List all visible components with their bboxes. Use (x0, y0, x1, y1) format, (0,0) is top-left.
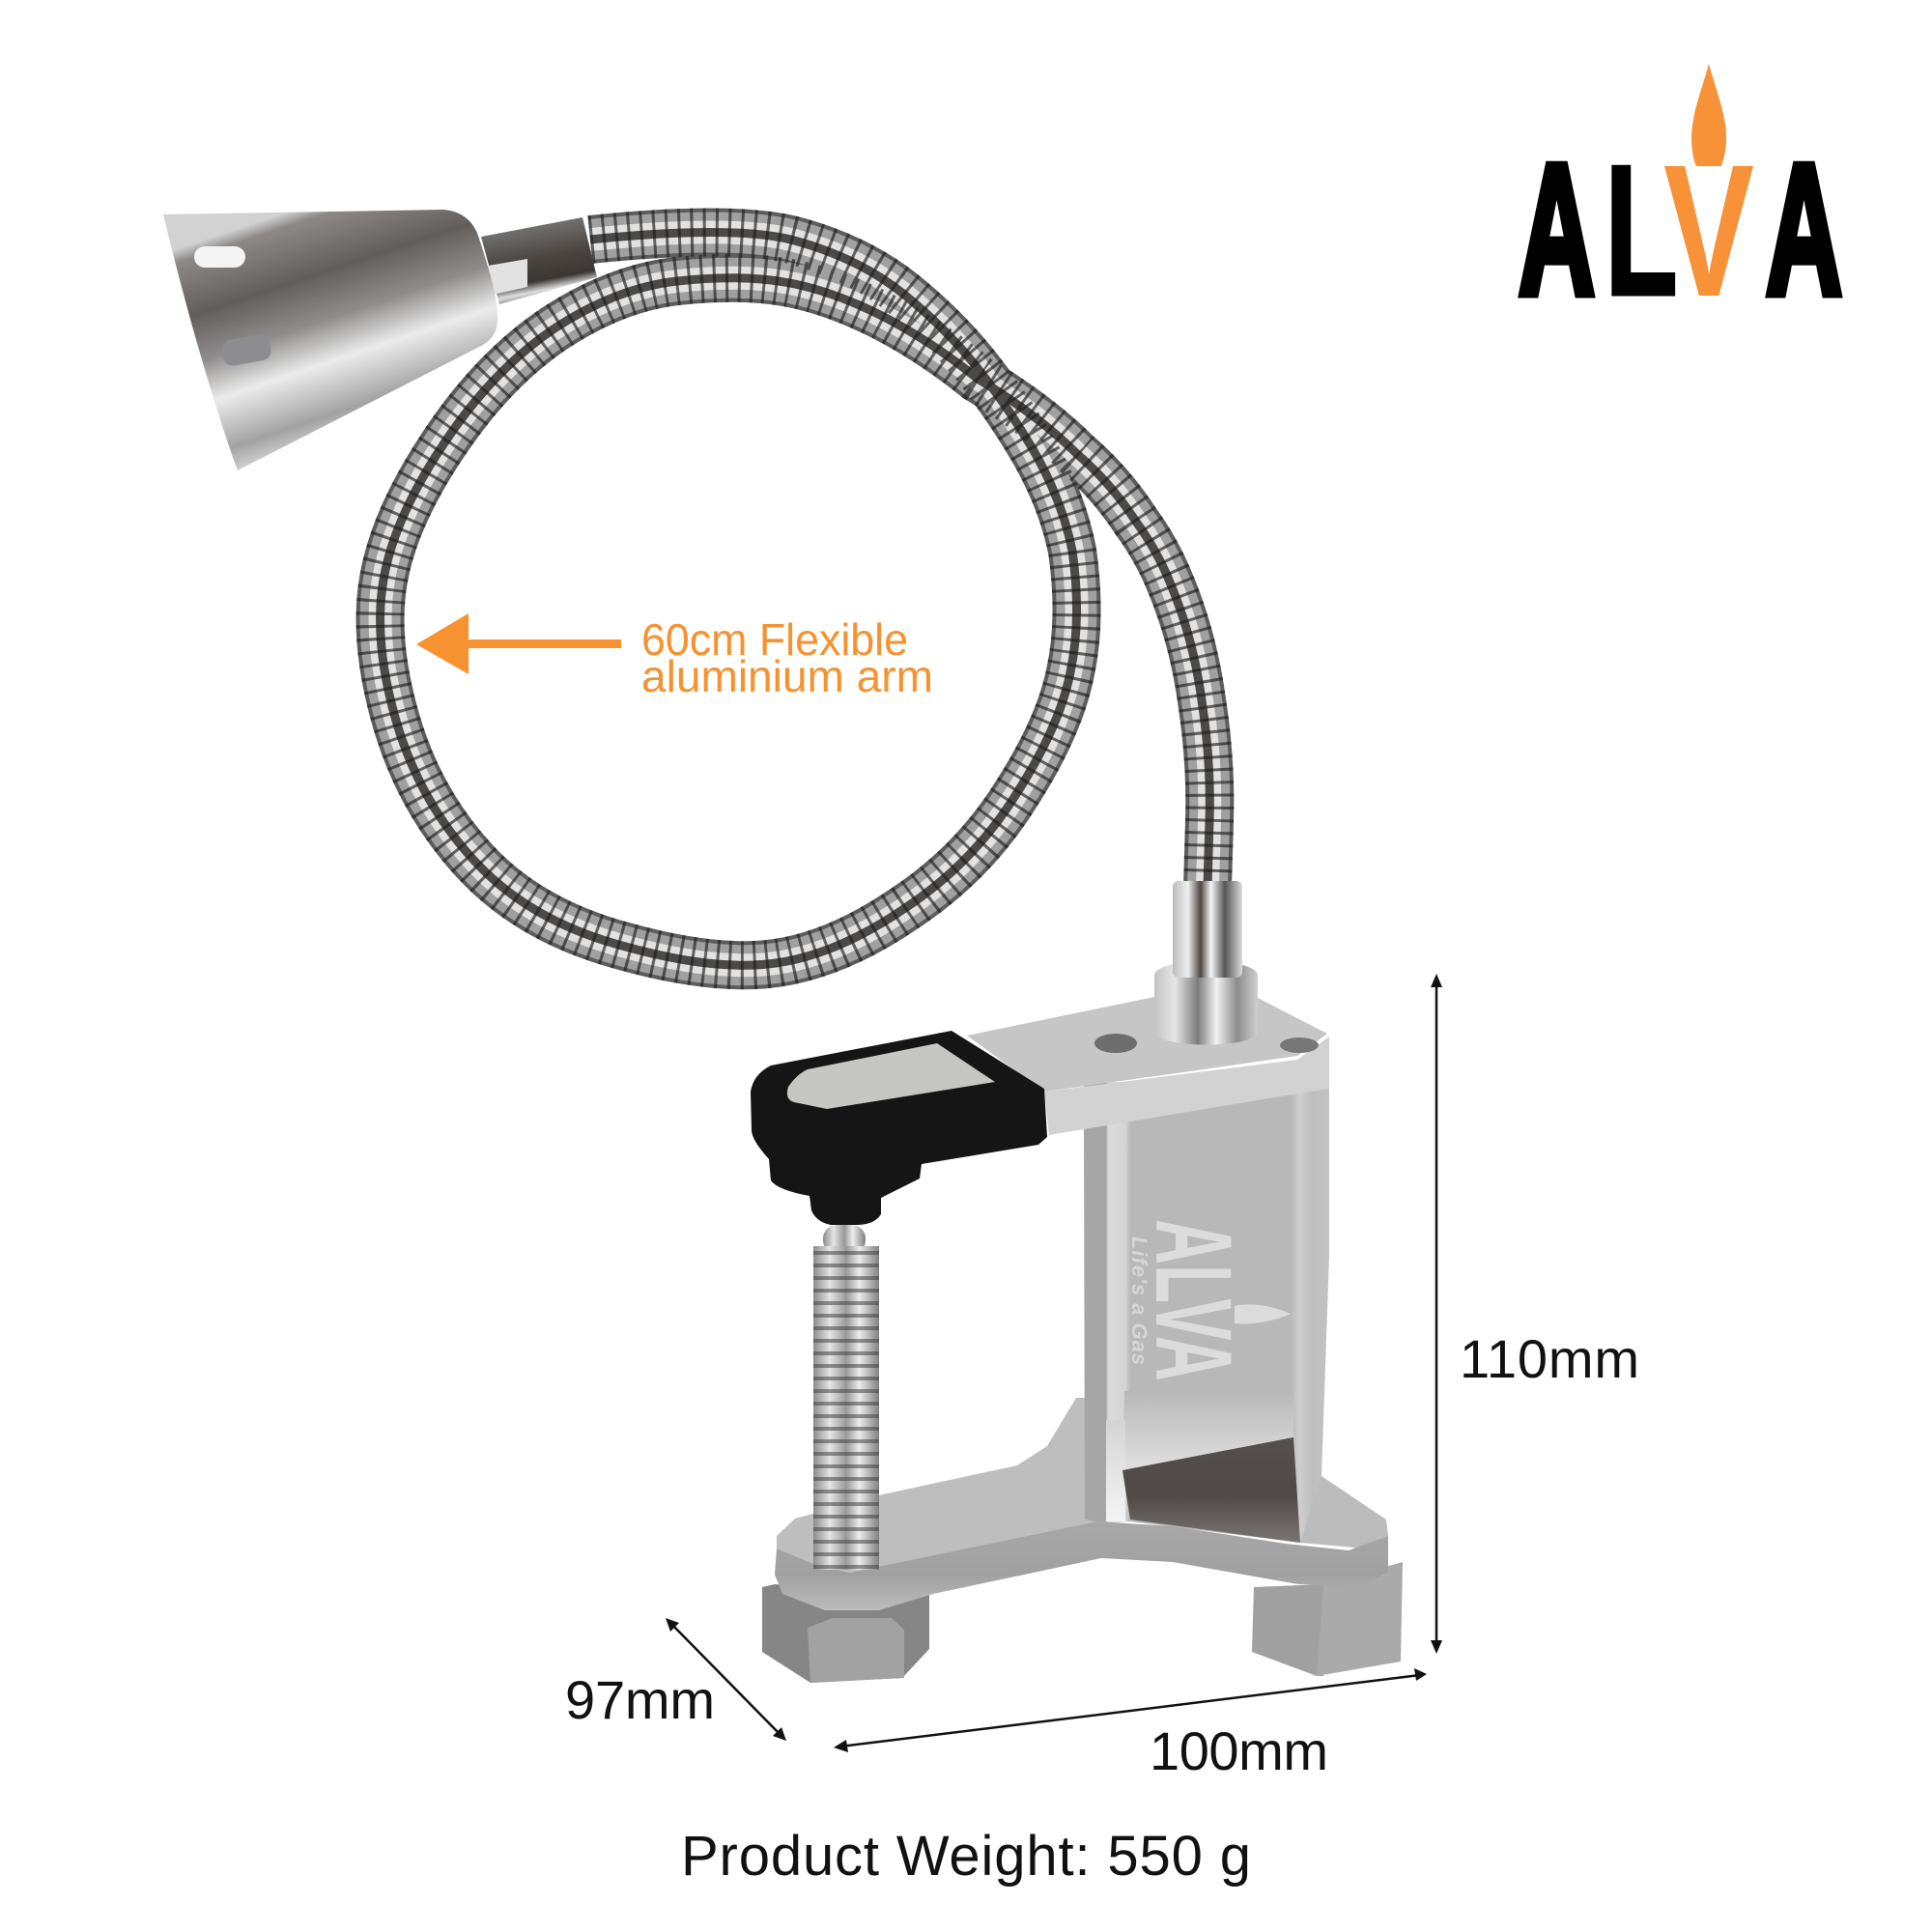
dimension: height (1431, 974, 1639, 1654)
cone body (163, 210, 497, 470)
product weight: Product Weight: 550 g (681, 1825, 1251, 1888)
callout text: flexible arm (641, 614, 933, 701)
column (1084, 1082, 1329, 1543)
screw 2 (1280, 1037, 1319, 1053)
lower slot (220, 333, 272, 367)
clamp base (751, 881, 1403, 1683)
chrome reflection (1122, 1437, 1300, 1543)
callout text: flexible arm: 60cm Flexible (641, 614, 908, 665)
top plate surface (967, 997, 1327, 1092)
logo letter V: V (1663, 126, 1754, 336)
engraved logo (1127, 1219, 1291, 1381)
black rubber knob (751, 1031, 1047, 1225)
flexible chrome arm (381, 232, 1209, 965)
engraved flame (1235, 1304, 1291, 1324)
logo: ALVA flame wordmark (1519, 64, 1842, 336)
top plate front edge (1044, 1037, 1329, 1135)
dimension: depth (565, 1618, 786, 1741)
rear nut (1252, 1562, 1403, 1676)
threaded rod (813, 1225, 879, 1570)
base plate rim (775, 1521, 1388, 1610)
upper slot (194, 246, 245, 268)
base plate right wing (1300, 1449, 1388, 1548)
chrome highlight strip (1106, 1420, 1125, 1521)
threaded neck (481, 217, 597, 304)
base plate top (777, 1398, 1103, 1573)
front nut (762, 1584, 929, 1683)
logo flame (1691, 64, 1726, 166)
callout arrow: flexible arm (416, 613, 621, 674)
dimension: width (834, 1668, 1427, 1781)
ferrule (1173, 881, 1242, 978)
engraved wordmark: ALVA (1133, 1219, 1254, 1381)
screw 1 (1094, 1034, 1137, 1053)
cone burner head (163, 210, 597, 470)
dimension: height: 110mm (1460, 1328, 1639, 1389)
logo letter A, second: A (1766, 125, 1842, 333)
chrome highlight above reflection (1122, 1391, 1293, 1470)
engraved tagline: Life's a Gas (1127, 1236, 1151, 1365)
collar (1154, 961, 1258, 1045)
dimension: width: 100mm (1150, 1720, 1328, 1781)
logo letter A: A (1519, 125, 1595, 333)
dimension: depth: 97mm (565, 1669, 715, 1730)
logo letter L: L (1605, 126, 1678, 334)
knurled nut (488, 259, 527, 295)
callout text: flexible arm: aluminium arm (641, 651, 933, 701)
knob window (787, 1043, 995, 1109)
